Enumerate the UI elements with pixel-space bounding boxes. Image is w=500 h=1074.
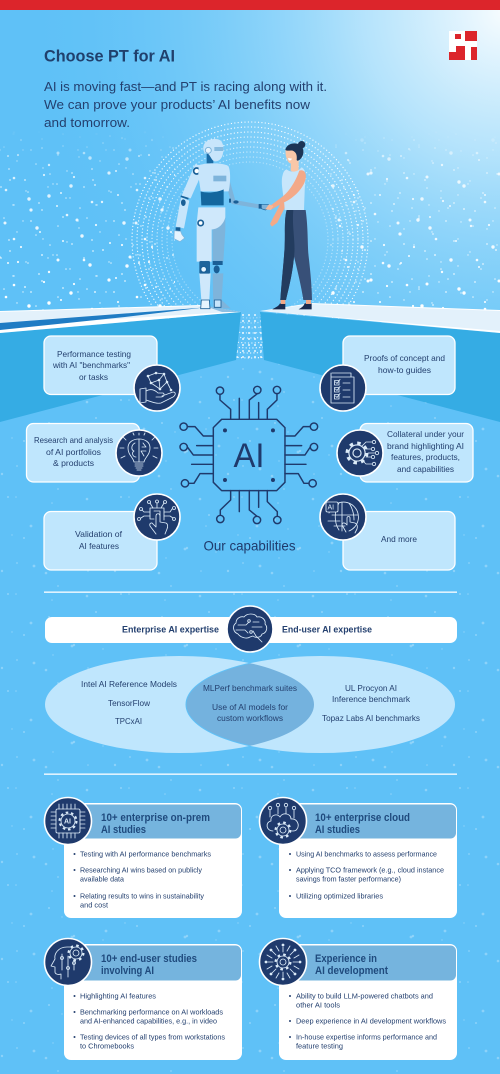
card: proofs of concept: [343, 336, 455, 394]
bullets: Applying TCO framework (e.g., cloud instance: [296, 866, 444, 874]
robot hip joint: [198, 220, 203, 226]
bullets: to Chromebooks: [80, 1042, 134, 1050]
divider: [44, 592, 457, 593]
panel title: [101, 953, 197, 977]
bullets: Highlighting AI features: [80, 992, 156, 1000]
panel title: [315, 812, 410, 836]
logo: [449, 31, 477, 60]
bullets: [74, 850, 211, 910]
end-user list: [322, 683, 420, 723]
icon: AI chip gear: [44, 798, 92, 844]
robot elbow: [176, 195, 189, 231]
card: collateral: brand highlighting AI: [387, 441, 464, 451]
card: proofs of concept: how-to guides: [378, 365, 431, 375]
card: validation: Validation of: [75, 529, 123, 539]
chip traces: [180, 386, 318, 524]
intro text: [44, 79, 327, 130]
enterprise list: Intel AI Reference Models: [81, 679, 177, 689]
robot rear leg: [212, 213, 231, 308]
robot hand: [261, 205, 270, 210]
robot front lower leg: [199, 273, 211, 300]
divider: [44, 774, 457, 775]
robot head: [203, 139, 223, 161]
robot neck: [207, 152, 213, 163]
expertise pill: End-user AI expertise: [282, 625, 372, 636]
shared list: custom workflows: [217, 713, 283, 723]
robot knees: [199, 261, 223, 274]
card: and more: [343, 512, 455, 570]
panel header: [279, 804, 456, 838]
bullets: Ability to build LLM-powered chatbots and: [296, 992, 433, 1000]
smile: [288, 158, 292, 161]
bullets: feature testing: [296, 1042, 343, 1050]
bullets: and cost: [80, 900, 108, 910]
end-user list: Topaz Labs AI benchmarks: [322, 713, 420, 723]
card: research and analysis: of AI portfolios: [46, 447, 101, 457]
robot extended upper arm: [225, 180, 235, 203]
card: performance testing: or tasks: [79, 372, 108, 382]
intro text: AI is moving fast—and PT is racing along with it.: [44, 79, 327, 94]
panel: enterprise on-prem studies: [64, 803, 242, 918]
enterprise list: TPCxAI: [115, 716, 142, 726]
robot vent: [213, 176, 226, 181]
red top bar: [0, 0, 500, 10]
expertise pill: [45, 617, 457, 643]
end-user list: UL Procyon AI: [345, 683, 397, 693]
central AI chip: [180, 386, 318, 524]
card: validation: AI features: [79, 541, 119, 551]
icon: brain circuit: [227, 606, 273, 652]
chip label: AI: [234, 437, 264, 475]
panel title: AI studies: [315, 824, 360, 836]
panel title: [101, 812, 210, 836]
icon: chip with pointing hand: [134, 494, 180, 540]
panel title: 10+ end-user studies: [101, 953, 197, 965]
robot wrist joint: [229, 199, 262, 209]
robot shoulder joint: [194, 168, 200, 174]
venn diagram: [45, 656, 455, 753]
icon: light bulb brain: [116, 430, 162, 476]
robot torso: [198, 163, 230, 191]
panel title: 10+ enterprise cloud: [315, 812, 410, 824]
top: [282, 167, 305, 210]
card: collateral: Collateral under your: [387, 429, 464, 439]
left platform: [0, 305, 241, 333]
robot visor: [214, 147, 223, 151]
hair: [285, 143, 303, 161]
card: collateral: [360, 424, 473, 482]
card: research and analysis: & products: [53, 458, 94, 468]
bullets: Utilizing optimized libraries: [296, 892, 383, 900]
robot forearm: [229, 199, 261, 209]
title: Choose PT for AI: [44, 48, 175, 66]
intro text: and tomorrow.: [44, 115, 130, 130]
panel header: [64, 804, 241, 838]
panel header: [64, 946, 241, 980]
concentric dotted halo: [132, 122, 368, 358]
bullets: Testing devices of all types from workstations: [80, 1032, 225, 1042]
heading: our capabilities: Our capabilities: [204, 538, 296, 554]
intro text: We can prove your products’ AI benefits now: [44, 97, 310, 112]
shared list: Use of AI models for: [212, 702, 288, 712]
card: research and analysis: Research and analysis: [34, 435, 113, 445]
panel title: Experience in: [315, 953, 377, 965]
bullets: Relating results to wins in sustainability: [80, 892, 204, 900]
ankles: [281, 300, 311, 304]
enterprise list: [81, 679, 177, 726]
enterprise list: TensorFlow: [108, 698, 151, 708]
bullets: In-house expertise informs performance and: [296, 1032, 437, 1042]
robot pelvis: [197, 207, 225, 262]
icon: head with gear: [44, 938, 92, 986]
icon: cloud gears: [260, 798, 306, 844]
panel: AI development experience: [279, 944, 457, 1060]
icon: AI globe: AI: [328, 504, 334, 512]
bullets: available data: [80, 874, 124, 884]
robot waist: [201, 189, 224, 205]
clasped hand: [265, 204, 273, 210]
illustration: robot: [174, 139, 270, 309]
card: validation: [44, 512, 157, 570]
trailing arm: [270, 202, 287, 227]
panel header: [279, 946, 456, 980]
card: collateral: and capabilities: [397, 464, 454, 474]
shared list: [203, 683, 297, 723]
bullets: [289, 992, 446, 1050]
scattered particle field: [0, 130, 500, 310]
bullets: and AI-enhanced capabilities, e.g., in video: [80, 1016, 217, 1026]
icon: gear with connectors: [337, 430, 383, 476]
hair bun: [298, 141, 305, 148]
icon: AI globe: [320, 494, 366, 540]
panel title: involving AI: [101, 965, 154, 977]
right platform: [260, 303, 500, 333]
bullets: other AI tools: [296, 1000, 340, 1010]
card: and more: And more: [381, 534, 417, 544]
trousers: [280, 210, 312, 300]
panel title: 10+ enterprise on-prem: [101, 812, 210, 824]
neck: [291, 161, 299, 173]
expertise pill: Enterprise AI expertise: [122, 625, 219, 636]
card: performance testing: [44, 336, 157, 394]
bullets: [74, 992, 225, 1050]
capability cards: [26, 336, 473, 570]
shared list: MLPerf benchmark suites: [203, 683, 297, 693]
dark road band: [0, 312, 500, 422]
card: proofs of concept: Proofs of concept and: [364, 353, 445, 363]
robot left arm: [182, 164, 205, 198]
dotted centre path: [236, 312, 264, 362]
shoes: [272, 303, 312, 309]
chip body: [213, 419, 285, 491]
bullets: Testing with AI performance benchmarks: [80, 850, 211, 858]
ellipse: end-user: [186, 656, 455, 753]
bullets: savings from faster performance): [296, 874, 401, 884]
bullets: Deep experience in AI development workflows: [296, 1016, 446, 1026]
panel title: [315, 953, 388, 977]
icon: AI chip gear: AI: [64, 818, 71, 826]
chip corner dots: [223, 428, 275, 482]
card: research and analysis: [26, 424, 140, 482]
end-user list: Inference benchmark: [332, 694, 411, 704]
overlap outline: [186, 663, 251, 746]
bullets: [289, 850, 444, 900]
card: collateral: features, products,: [391, 452, 460, 462]
card: performance testing: with AI "benchmarks": [52, 360, 130, 370]
bullets: Researching AI wins based on publicly: [80, 866, 202, 874]
icon: radial gear network: [260, 938, 306, 986]
card: performance testing: Performance testing: [57, 349, 131, 359]
panel: end-user studies: [64, 944, 242, 1060]
icon: hand with network: [134, 365, 180, 411]
panel title: AI development: [315, 965, 388, 977]
bullets: Benchmarking performance on AI workloads: [80, 1008, 223, 1016]
robot feet: [201, 300, 221, 309]
robot hand left: [174, 231, 185, 242]
panel title: AI studies: [101, 824, 146, 836]
panel: enterprise cloud studies: [279, 803, 457, 918]
overlap: [186, 663, 314, 746]
face: [286, 147, 298, 164]
bullets: Using AI benchmarks to assess performance: [296, 850, 437, 858]
forward arm: [269, 170, 306, 209]
icon: documents checklist: [320, 365, 366, 411]
ellipse: enterprise: [45, 656, 314, 753]
illustration: woman: [265, 141, 312, 309]
robot ear: [205, 147, 211, 153]
